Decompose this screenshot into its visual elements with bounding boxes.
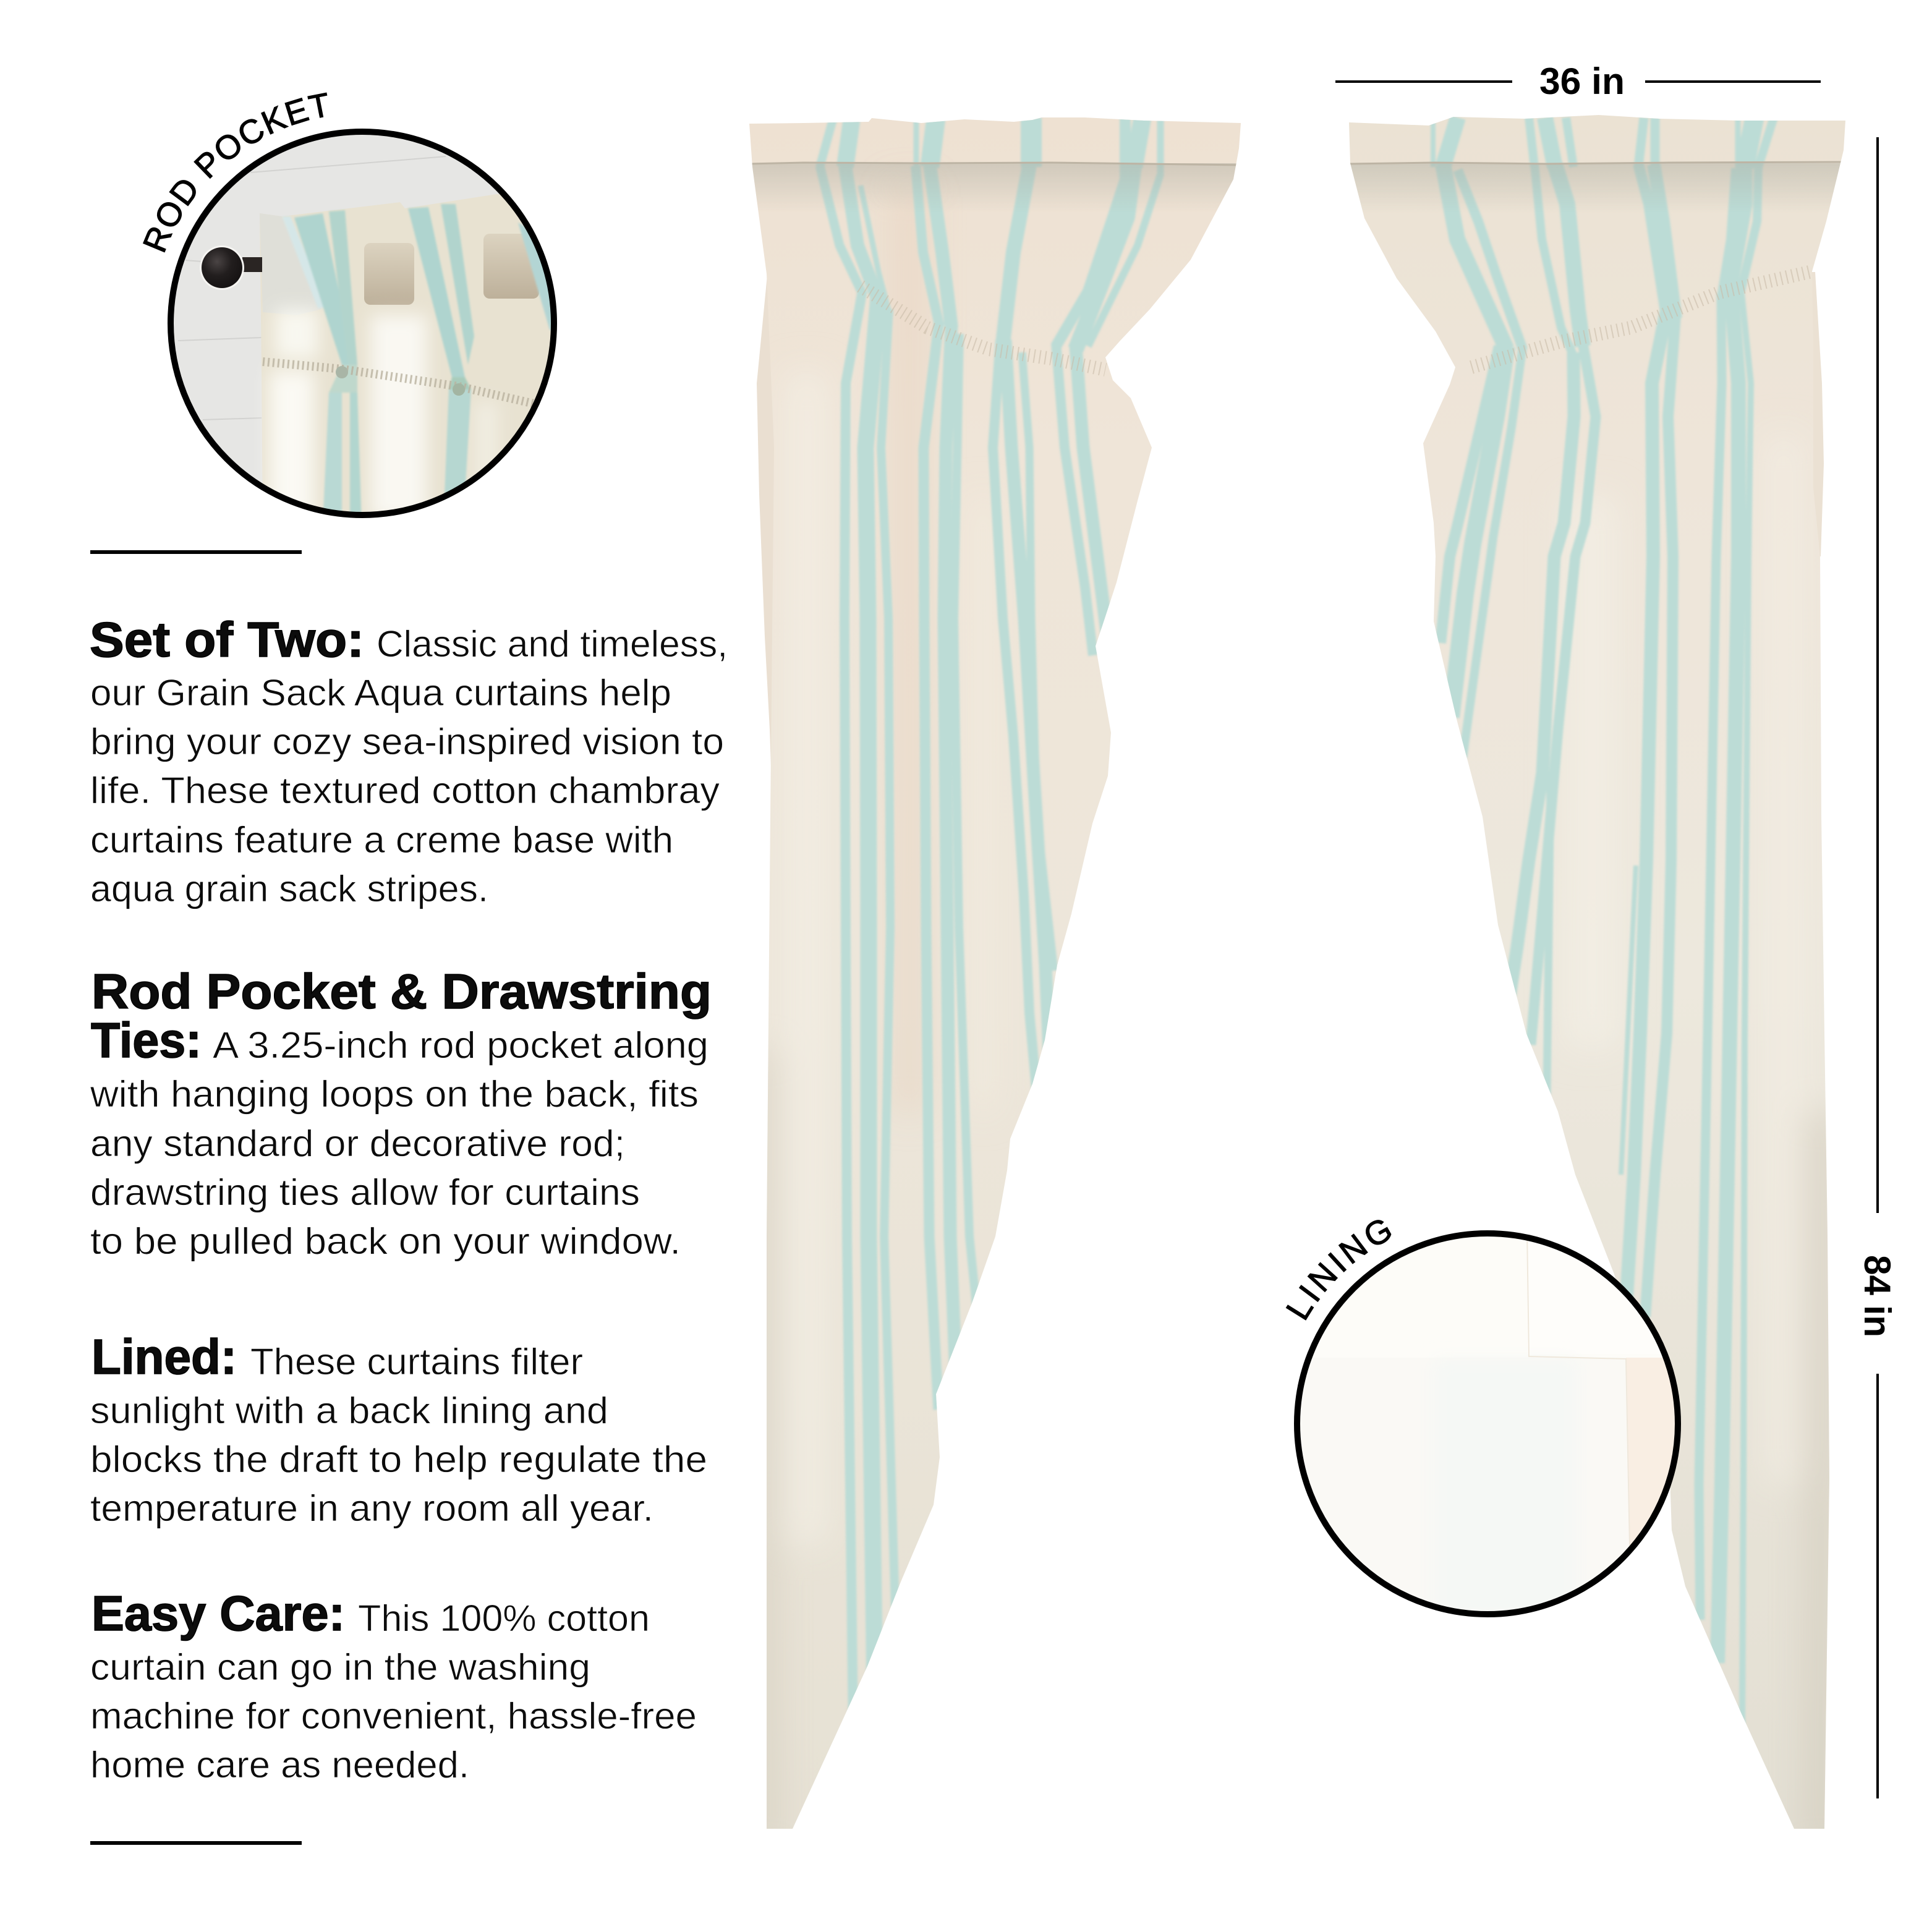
divider top xyxy=(90,550,302,554)
right curtain xyxy=(1342,111,1849,1855)
text block: lined: temperature in any room all year. xyxy=(90,1487,653,1529)
rod pocket shading xyxy=(1342,163,1849,213)
text block: easy care: machine for convenient, hassle-free xyxy=(90,1695,697,1737)
heading: Easy Care: xyxy=(91,1586,345,1641)
label: 36 in: 36 in xyxy=(1539,61,1625,102)
left curtain xyxy=(742,111,1249,1855)
lining inset xyxy=(1286,1220,1681,1617)
text block: rod pocket and drawstring: with hanging loops on the back, fits xyxy=(90,1073,699,1115)
stripes xyxy=(820,117,1160,1725)
height dimension xyxy=(1857,137,1898,1798)
label: 84 in: 84 in xyxy=(1857,1255,1898,1337)
text block: set of two: bring your cozy sea-inspired vision to xyxy=(90,721,724,762)
text block: easy care: This 100% cotton xyxy=(358,1598,650,1639)
heading: Rod Pocket & Drawstring xyxy=(91,964,712,1019)
text block: rod pocket and drawstring: drawstring ties allow for curtains xyxy=(90,1172,640,1213)
heading: Lined: xyxy=(91,1329,237,1384)
text block: easy care: curtain can go in the washing xyxy=(90,1646,590,1688)
text block: lined: These curtains filter xyxy=(250,1341,583,1382)
below gather section xyxy=(1451,346,1507,717)
text block: rod pocket and drawstring: to be pulled back on your window. xyxy=(90,1220,681,1262)
inset photo: curtain on rod xyxy=(167,127,563,526)
pocket section xyxy=(820,117,833,167)
text block: lined: sunlight with a back lining and xyxy=(90,1390,608,1431)
gathered drawstring xyxy=(861,286,1105,370)
text block: lined xyxy=(90,1329,707,1529)
label: lining: LINING xyxy=(1286,1220,1391,1321)
fabric tone bands xyxy=(767,209,922,1829)
text block: rod pocket and drawstring xyxy=(90,964,712,1262)
text block: lined: blocks the draft to help regulate the xyxy=(90,1439,707,1480)
text block: set of two xyxy=(90,612,728,909)
text block: set of two: our Grain Sack Aqua curtains help xyxy=(90,672,671,713)
gathered drawstring xyxy=(1471,271,1812,367)
text block: set of two: life. These textured cotton chambray xyxy=(90,770,720,811)
icon: rod finial xyxy=(200,245,262,290)
tie right xyxy=(1811,272,1824,556)
rod pocket shading xyxy=(742,163,1249,213)
hem to gather section xyxy=(820,166,862,294)
text block: set of two: curtains feature a creme base with xyxy=(90,819,673,861)
rod pocket inset xyxy=(143,93,557,518)
text block: set of two: Classic and timeless, xyxy=(377,623,728,665)
hem to gather section xyxy=(1443,164,1507,349)
tie left xyxy=(757,275,780,821)
text block: rod pocket and drawstring: Ties: xyxy=(91,1013,202,1068)
divider bottom xyxy=(90,1841,302,1845)
text block: easy care xyxy=(90,1586,697,1785)
width dimension xyxy=(1335,61,1821,102)
fabric tone bands xyxy=(1564,433,1833,1855)
text block: easy care: home care as needed. xyxy=(90,1744,469,1785)
stripes xyxy=(1433,117,1774,1725)
inset photo: lining xyxy=(1292,1227,1688,1623)
text block: rod pocket and drawstring: A 3.25-inch rod pocket along xyxy=(213,1024,709,1066)
label: rod pocket: ROD POCKET xyxy=(143,93,328,252)
below gather section xyxy=(845,291,862,1725)
text block: rod pocket and drawstring: any standard or decorative rod; xyxy=(90,1123,625,1164)
heading: Set of Two: xyxy=(90,612,364,667)
text block: set of two: aqua grain sack stripes. xyxy=(90,868,488,909)
pocket section xyxy=(1431,117,1436,167)
